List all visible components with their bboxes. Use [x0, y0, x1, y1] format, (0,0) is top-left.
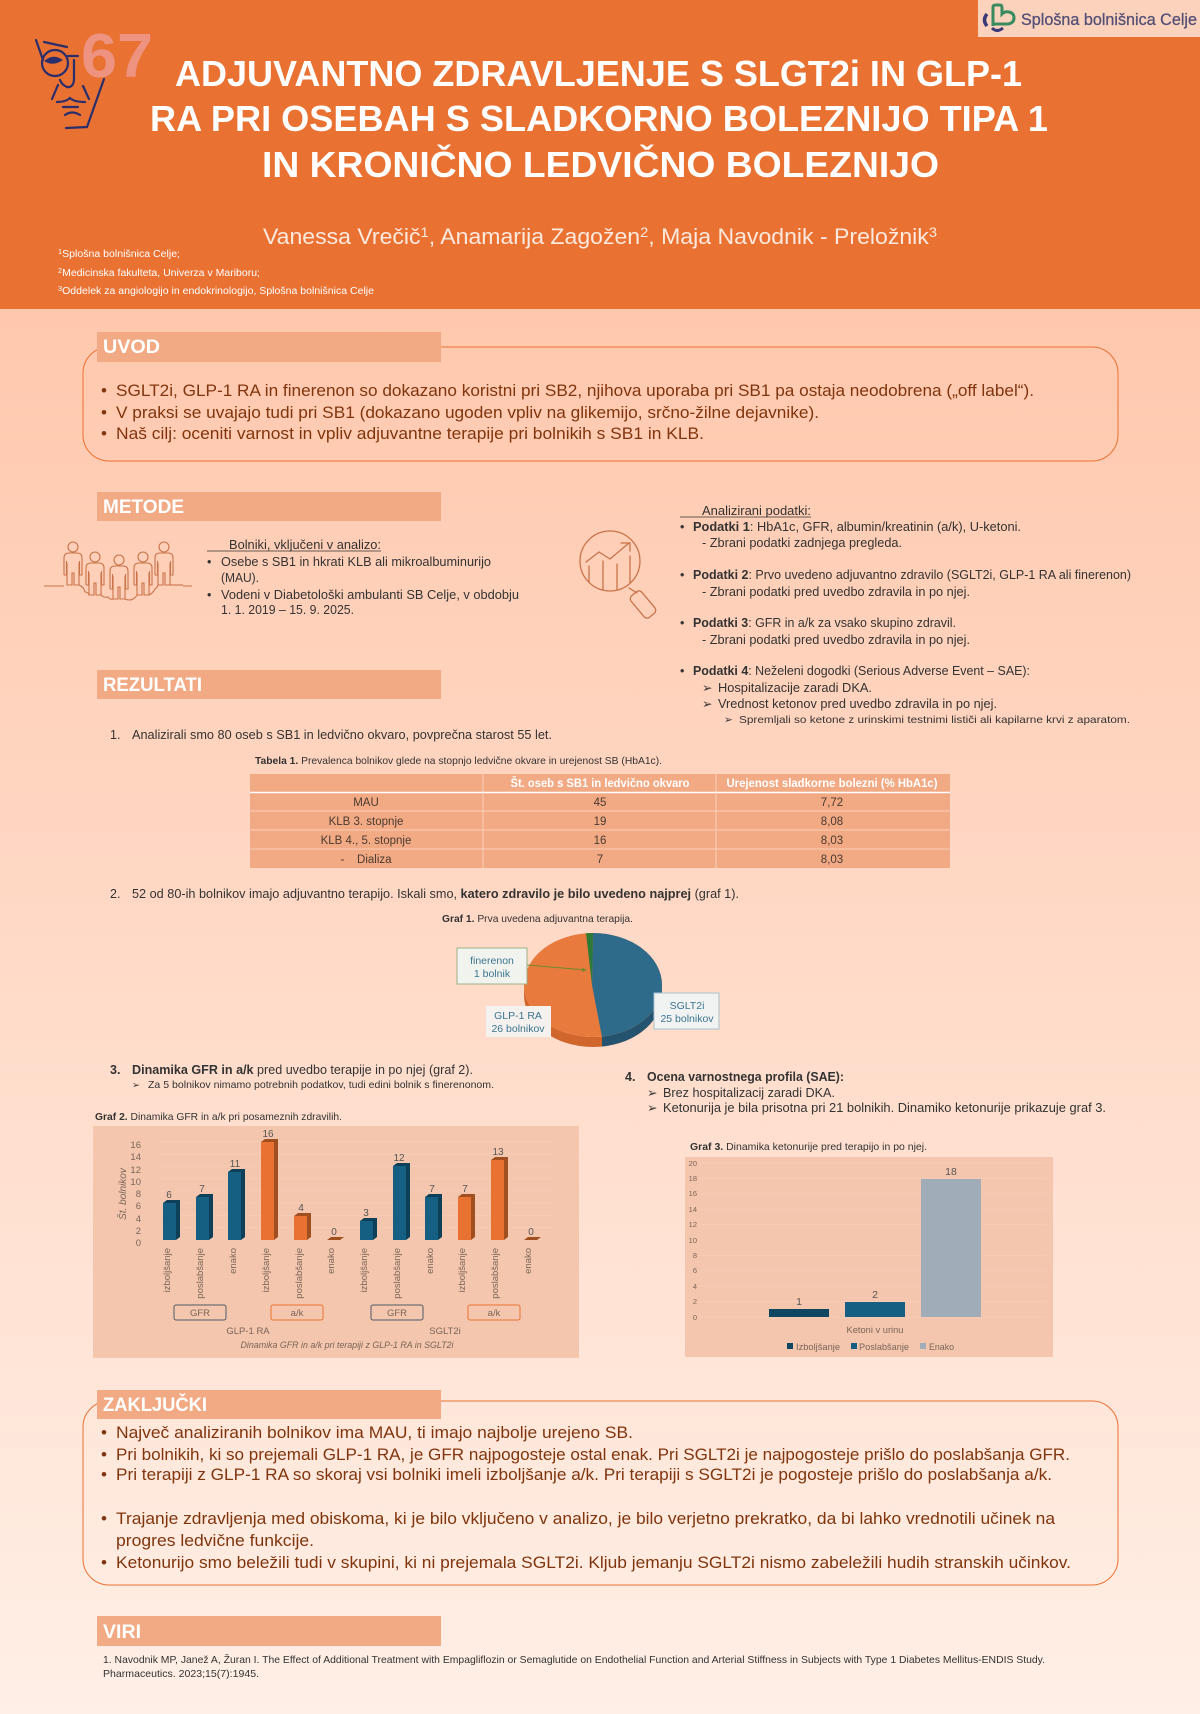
- text: bolniki: 1. 1. 2019 – 15. 9. 2025.: [221, 603, 354, 617]
- value labels: 4: [298, 1203, 304, 1214]
- text: result 4: ➢: [647, 1100, 657, 1115]
- text: result 3: Dinamika GFR in a/k pred uvedbo terapije in po njej (graf 2).: [132, 1063, 473, 1077]
- text: analizirani podatki: Podatki 3: GFR in a/k za vsako skupino zdravil.: [693, 616, 956, 630]
- label: sglt2i: 25 bolnikov: [660, 1013, 714, 1025]
- pie chart: first therapy: [457, 933, 719, 1047]
- text: uvod bullets: •: [101, 381, 107, 400]
- table 1: Št. oseb s SB1 in ledvično okvaro: [510, 777, 690, 790]
- y axis: 12: [130, 1165, 141, 1176]
- heading: rezultati: REZULTATI: [103, 675, 202, 696]
- category labels: poslabšanje: [490, 1248, 501, 1299]
- category labels: poslabšanje: [392, 1248, 403, 1299]
- text: analizirani podatki: •: [680, 664, 684, 678]
- y axis: 14: [689, 1205, 697, 1214]
- text: analizirani podatki: Spremljali so ketone z urinskimi testnimi lističi ali kapilarne krvi z aparatom.: [739, 714, 1130, 726]
- y axis: 2: [693, 1297, 697, 1306]
- label: glp-1 ra: GLP-1 RA: [494, 1010, 542, 1022]
- text: result 4: Ketonurija je bila prisotna pri 21 bolnikih. Dinamiko ketonurije prikazuje graf 3.: [663, 1101, 1106, 1115]
- graph 3 caption: Graf 3. Dinamika ketonurije pred terapijo in po njej.: [690, 1141, 927, 1153]
- value labels: 3: [363, 1208, 369, 1219]
- y axis: [130, 1140, 141, 1249]
- text: analizirani podatki: •: [680, 520, 684, 534]
- text: conclusions: Pri terapiji z GLP-1 RA so skoraj vsi bolniki imeli izboljšanje a/k. Pri terapiji s SGLT2i je pogosteje prišlo do poslabšanja a/k.: [116, 1465, 1052, 1484]
- text: analizirani podatki: Podatki 4: Neželeni dogodki (Serious Adverse Event – SAE):: [693, 664, 1030, 678]
- icon: group of people: [44, 542, 192, 600]
- affiliations: 3: [58, 286, 62, 293]
- y axis: 10: [130, 1177, 141, 1188]
- label: glp-1 ra: 26 bolnikov: [491, 1023, 545, 1035]
- group boxes: [174, 1305, 520, 1320]
- title: IN KRONIČNO LEDVIČNO BOLEZNIJO: [262, 143, 939, 185]
- text: conclusions: Pri bolnikih, ki so prejemali GLP-1 RA, je GFR najpogosteje ostal enak. Pri SGLT2i je najpogosteje prišlo do poslabšanja GFR.: [116, 1445, 1070, 1464]
- text: references: Pharmaceutics. 2023;15(7):1945.: [103, 1668, 259, 1680]
- value labels: [796, 1166, 957, 1308]
- text: conclusions: •: [101, 1423, 107, 1442]
- table 1: 16: [594, 835, 606, 847]
- y axis: 6: [693, 1266, 697, 1275]
- text: uvod bullets: SGLT2i, GLP-1 RA in finerenon so dokazano koristni pri SB2, njihova uporaba pri SB1 pa ostaja neodobrena („off label“).: [116, 381, 1034, 400]
- text: result 3: 3.: [110, 1063, 120, 1077]
- value labels: 6: [166, 1190, 172, 1201]
- authors: , Maja Navodnik - Preložnik: [648, 224, 930, 249]
- text: conclusions: progres ledvične funkcije.: [116, 1531, 314, 1550]
- graph 2 caption: Graf 2. Dinamika GFR in a/k pri posameznih zdravilih.: [95, 1111, 342, 1123]
- affiliations: Medicinska fakulteta, Univerza v Mariboru;: [62, 268, 260, 279]
- value labels: 7: [199, 1184, 205, 1195]
- bars: [163, 1139, 541, 1240]
- text: result 4: 4.: [625, 1070, 635, 1084]
- text: analizirani podatki: ➢: [724, 714, 733, 726]
- category labels: enako: [523, 1248, 534, 1274]
- table 1: - Dializa: [340, 854, 392, 866]
- text: uvod bullets: [101, 381, 1034, 443]
- text: bolniki: Vodeni v Diabetološki ambulanti SB Celje, v obdobju: [221, 588, 519, 602]
- category labels: izboljšanje: [359, 1248, 370, 1292]
- logo: Splošna bolnišnica Celje: [978, 0, 1200, 37]
- table 1: Urejenost sladkorne bolezni (% HbA1c): [726, 778, 938, 790]
- table 1: 8,08: [821, 816, 843, 828]
- text: result 3: Za 5 bolnikov nimamo potrebnih podatkov, tudi edini bolnik s finerenonom.: [148, 1079, 494, 1091]
- affiliations: Splošna bolnišnica Celje;: [62, 249, 180, 260]
- title: RA PRI OSEBAH S SLADKORNO BOLEZNIJO TIPA 1: [150, 98, 1048, 139]
- table 1: 7: [597, 854, 603, 866]
- text: analizirani podatki: Podatki 2: Prvo uvedeno adjuvantno zdravilo (SGLT2i, GLP-1 RA ali finerenon): [693, 568, 1131, 582]
- heading: uvod: UVOD: [103, 337, 160, 358]
- y axis: 6: [136, 1201, 141, 1212]
- text: result 1: Analizirali smo 80 oseb s SB1 in ledvično okvaro, povprečna starost 55 let.: [132, 728, 552, 742]
- value labels: 18: [945, 1166, 957, 1178]
- chart: graf 2 bars: a/k: [488, 1308, 501, 1319]
- label: finerenon: 1 bolnik: [474, 968, 511, 980]
- chart: graf 2 bars: GFR: [387, 1308, 407, 1319]
- bars: [769, 1179, 981, 1317]
- text: analizirani podatki: - Zbrani podatki zadnjega pregleda.: [702, 536, 902, 550]
- heading: metode: METODE: [103, 497, 184, 518]
- text: bolniki: •: [207, 555, 211, 569]
- text: analizirani podatki: Vrednost ketonov pred uvedbo zdravila in po njej.: [718, 697, 997, 711]
- y axis title: Št. bolnikov: [116, 1167, 129, 1220]
- category labels: poslabšanje: [195, 1248, 206, 1299]
- text: result 4: [625, 1070, 1106, 1115]
- text: result 3: ➢: [132, 1080, 140, 1091]
- legend: [787, 1342, 954, 1353]
- text: analizirani podatki: [680, 504, 1131, 726]
- legend: Izboljšanje: [796, 1342, 840, 1353]
- text: analizirani podatki: Podatki 1: HbA1c, GFR, albumin/kreatinin (a/k), U-ketoni.: [693, 520, 1021, 534]
- category labels: poslabšanje: [294, 1248, 305, 1299]
- text: bolniki: [207, 538, 519, 617]
- heading: zaključki: ZAKLJUČKI: [103, 1394, 207, 1416]
- axis title: Ketoni v urinu: [846, 1325, 904, 1336]
- text: references: [103, 1653, 1045, 1680]
- panel: uvod: [83, 332, 1118, 461]
- category labels: enako: [326, 1248, 337, 1274]
- heading: rezultati: [97, 670, 441, 699]
- text: analizirani podatki: Hospitalizacije zaradi DKA.: [718, 681, 872, 695]
- text: uvod bullets: •: [101, 424, 107, 443]
- graph 1 caption: Graf 1. Prva uvedena adjuvantna terapija.: [442, 913, 633, 925]
- y axis: 18: [689, 1174, 697, 1183]
- text: conclusions: Trajanje zdravljenja med obiskoma, ki je bilo vključeno v analizo, je bilo verjetno prekratko, da bi lahko vrednotili učinek na: [116, 1509, 1056, 1528]
- category labels: enako: [228, 1248, 239, 1274]
- chart: graf 2 bars: [93, 1126, 579, 1358]
- y axis: 20: [689, 1159, 697, 1168]
- legend: Poslabšanje: [859, 1342, 909, 1353]
- value labels: 2: [872, 1289, 878, 1301]
- heading: viri: VIRI: [103, 1622, 141, 1643]
- text: result 3: [110, 1063, 494, 1091]
- table 1: 8,03: [821, 835, 843, 847]
- text: uvod bullets: Naš cilj: oceniti varnost in vpliv adjuvantne terapije pri bolnikih s SB1 in KLB.: [116, 424, 704, 443]
- text: uvod bullets: V praksi se uvajajo tudi pri SB1 (dokazano ugoden vpliv na glikemijo, srčno-žilne dejavnike).: [116, 403, 819, 422]
- chart: graf 2 bars: GFR: [190, 1308, 210, 1319]
- text: analizirani podatki: •: [680, 568, 684, 582]
- chart: graf 2 bars: GLP-1 RA: [226, 1326, 270, 1337]
- table caption: Tabela 1. Prevalenca bolnikov glede na stopnjo ledvične okvare in urejenost SB (HbA1c).: [255, 755, 662, 767]
- category labels: [162, 1248, 534, 1299]
- heading: uvod: [97, 332, 441, 362]
- text: result 4: ➢: [647, 1085, 657, 1100]
- text: analizirani podatki: ➢: [702, 696, 712, 711]
- table 1: KLB 3. stopnje: [329, 816, 403, 828]
- category labels: izboljšanje: [162, 1248, 173, 1292]
- icon: face with glasses: [36, 40, 104, 128]
- affiliations: Oddelek za angiologijo in endokrinologijo, Splošna bolnišnica Celje: [62, 286, 374, 297]
- value labels: 7: [429, 1184, 435, 1195]
- poster number: 67: [81, 22, 153, 91]
- text: conclusions: •: [101, 1553, 107, 1572]
- label: glp-1 ra: [486, 1006, 551, 1037]
- affiliations: [58, 249, 374, 297]
- value labels: 11: [230, 1159, 241, 1170]
- text: bolniki: •: [207, 588, 211, 602]
- y axis: 0: [693, 1313, 697, 1322]
- table 1: 8,03: [821, 854, 843, 866]
- authors: 2: [640, 224, 649, 240]
- text: analizirani podatki: - Zbrani podatki pred uvedbo zdravila in po njej.: [702, 633, 970, 647]
- text: bolniki: (MAU).: [221, 571, 259, 585]
- authors: 3: [929, 224, 937, 240]
- text: result 4: Brez hospitalizacij zaradi DKA.: [663, 1086, 835, 1100]
- y axis: [689, 1159, 697, 1322]
- y axis: 4: [136, 1214, 141, 1225]
- value labels: 7: [462, 1184, 468, 1195]
- y axis: 8: [136, 1189, 141, 1200]
- text: bolniki: Osebe s SB1 in hkrati KLB ali mikroalbuminurijo: [221, 555, 491, 569]
- title: ADJUVANTNO ZDRAVLJENJE S SLGT2i IN GLP-1: [175, 53, 1022, 94]
- header banner: [0, 0, 1200, 309]
- category labels: izboljšanje: [457, 1248, 468, 1292]
- y axis: 4: [693, 1282, 697, 1291]
- label: finerenon: finerenon: [470, 955, 514, 967]
- panel: zaključki: [83, 1390, 1118, 1585]
- heading: zaključki: [97, 1390, 441, 1419]
- text: conclusions: •: [101, 1445, 107, 1464]
- value labels: 1: [796, 1296, 802, 1308]
- value labels: 12: [393, 1153, 405, 1164]
- affiliations: 1: [58, 249, 62, 256]
- table 1: MAU: [353, 797, 379, 809]
- text: analizirani podatki: ➢: [702, 680, 712, 695]
- authors: , Anamarija Zagožen: [429, 224, 640, 249]
- table 1: 19: [594, 816, 606, 828]
- heading: viri: [97, 1616, 441, 1646]
- table 1: 45: [594, 797, 606, 809]
- text: result 4: Ocena varnostnega profila (SAE):: [647, 1070, 844, 1084]
- chart: graf 3 bars: [685, 1157, 1053, 1357]
- text: conclusions: Ketonurijo smo beležili tudi v skupini, ki ni prejemala SGLT2i. Kljub jemanju SGLT2i nismo zabeležili hudih stranskih učinkov.: [116, 1553, 1071, 1572]
- text: conclusions: Največ analiziranih bolnikov ima MAU, ti imajo najbolje urejeno SB.: [116, 1423, 633, 1442]
- heading: metode: [97, 492, 441, 521]
- table 1: KLB 4., 5. stopnje: [321, 835, 411, 847]
- value labels: 0: [331, 1227, 337, 1238]
- text: analizirani podatki: - Zbrani podatki pred uvedbo zdravila in po njej.: [702, 585, 970, 599]
- value labels: 13: [492, 1147, 504, 1158]
- table 1: 7,72: [821, 797, 843, 809]
- legend: Enako: [929, 1342, 954, 1353]
- label: finerenon: [457, 948, 527, 984]
- text: conclusions: •: [101, 1509, 107, 1528]
- value labels: 16: [262, 1129, 274, 1140]
- value labels: [166, 1129, 534, 1238]
- y axis: 10: [689, 1236, 697, 1245]
- chart: graf 2 bars: a/k: [291, 1308, 304, 1319]
- y axis: 0: [136, 1238, 141, 1249]
- chart: graf 2 bars: Dinamika GFR in a/k pri terapiji z GLP-1 RA in SGLT2i: [240, 1340, 454, 1351]
- affiliations: 2: [58, 268, 62, 275]
- category labels: enako: [425, 1248, 436, 1274]
- y axis: 14: [130, 1152, 141, 1163]
- category labels: izboljšanje: [261, 1248, 272, 1292]
- label: sglt2i: [654, 993, 719, 1029]
- text: conclusions: •: [101, 1465, 107, 1484]
- text: uvod bullets: •: [101, 403, 107, 422]
- icon: magnifier with chart: [580, 531, 657, 620]
- label: sglt2i: SGLT2i: [670, 1000, 704, 1012]
- text: analizirani podatki: Analizirani podatki:: [702, 504, 811, 518]
- chart: graf 2 bars: SGLT2i: [429, 1326, 461, 1337]
- y axis: 8: [693, 1251, 697, 1260]
- title: [150, 53, 1048, 185]
- authors: Vanessa Vrečič: [263, 224, 413, 249]
- table 1: [250, 774, 950, 868]
- text: result 2: 52 od 80-ih bolnikov imajo adjuvantno terapijo. Iskali smo, katero zdravilo je bilo uvedeno najprej (graf 1).: [132, 887, 739, 901]
- authors: 1: [421, 224, 429, 240]
- text: analizirani podatki: •: [680, 616, 684, 630]
- value labels: 0: [528, 1227, 534, 1238]
- text: conclusions: [101, 1423, 1071, 1572]
- y axis: 16: [130, 1140, 141, 1151]
- y axis: 2: [136, 1226, 141, 1237]
- text: result 1: 1.: [110, 728, 120, 742]
- y axis: 16: [689, 1189, 697, 1198]
- y axis: 12: [689, 1220, 697, 1229]
- text: references: 1. Navodnik MP, Janež A, Žuran I. The Effect of Additional Treatment with Empagliflozin or Semaglutide on Endothelial Function and Arterial Stiffness in Subjects with Type 1 Diabetes Mellitus-ENDIS Study.: [103, 1653, 1045, 1666]
- text: result 2: 2.: [110, 887, 120, 901]
- text: bolniki: Bolniki, vključeni v analizo:: [229, 538, 381, 552]
